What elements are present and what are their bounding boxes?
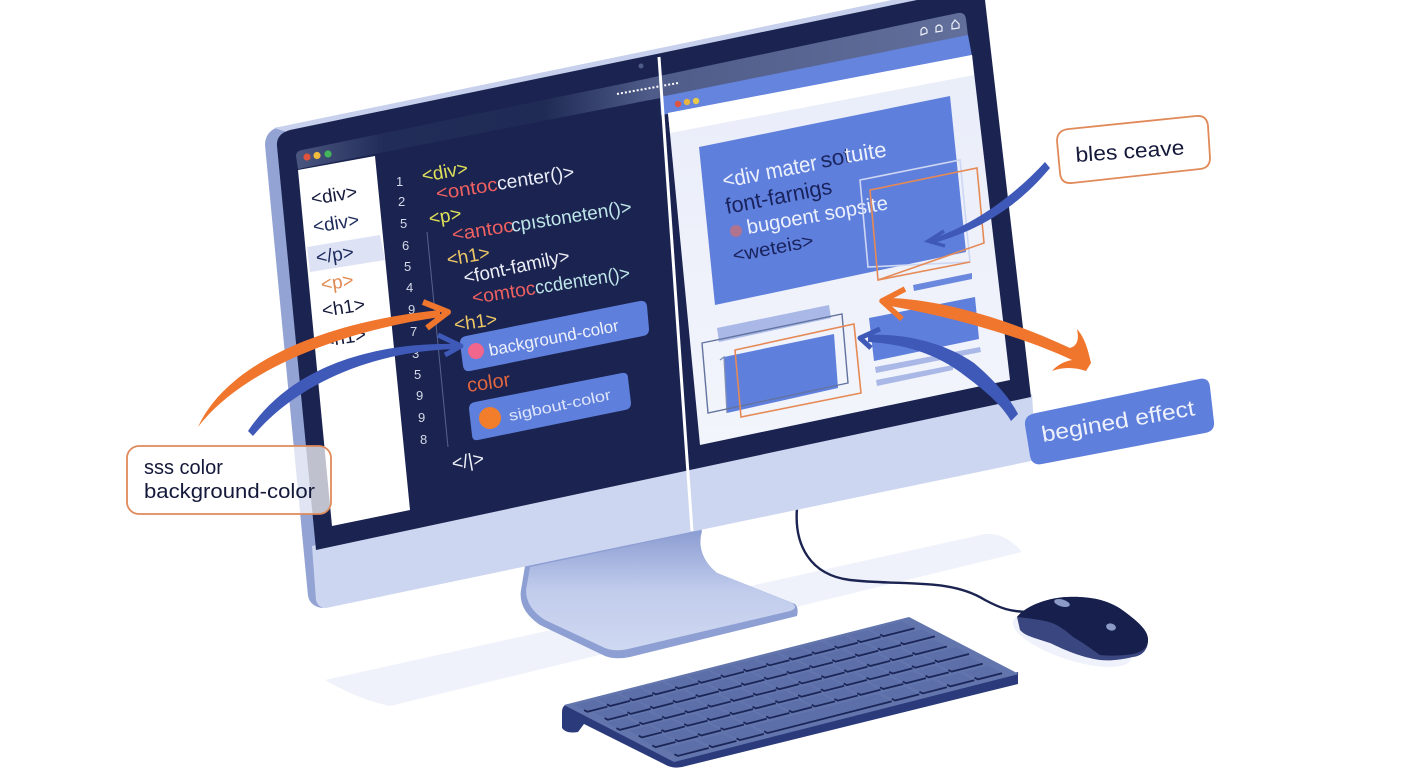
monitor left side edge (265, 127, 336, 608)
mouse top shell (1017, 597, 1148, 656)
monitor cable (797, 508, 1030, 612)
line numbers: 5 (414, 367, 421, 382)
line numbers (396, 174, 427, 447)
code lines: center()> (495, 162, 576, 195)
dotted slider line (617, 83, 678, 94)
line numbers: 9 (408, 302, 415, 317)
line numbers: 2 (398, 194, 405, 209)
code lines: <omtoc (470, 278, 537, 309)
code lines: ccdenten()> (533, 263, 632, 299)
mouse base (1017, 597, 1148, 660)
callout: begined effect (1025, 379, 1214, 464)
file tree sidebar: <h1> (321, 324, 368, 352)
keyboard front edge (562, 672, 1018, 768)
arrow: blue to preview frame (928, 162, 1050, 246)
highlight: secondary color (469, 373, 631, 440)
file tree sidebar: <p> (319, 270, 355, 296)
code lines: <font-family> (462, 246, 572, 289)
keyboard (562, 617, 1019, 768)
code lines: <antoc (450, 215, 515, 246)
editor title bar (296, 76, 660, 169)
line numbers: 5 (404, 259, 411, 274)
line numbers: 9 (418, 410, 425, 425)
callout: bles ceave: bles ceave (1075, 136, 1185, 167)
callout: css color (127, 446, 331, 514)
panel: browser preview (650, 13, 1010, 445)
file tree sidebar (298, 156, 410, 526)
hero text: <weteis> (731, 231, 815, 267)
monitor bezel (277, 0, 1031, 550)
divider line (659, 57, 692, 531)
mouse shadow (1007, 602, 1137, 678)
monitor chin (312, 394, 1036, 608)
floor shadow (325, 534, 1022, 706)
monitor stand (521, 529, 798, 658)
lower right card (869, 273, 981, 386)
code lines: <h1> (453, 309, 499, 336)
line numbers: 6 (402, 238, 409, 253)
camera dot (638, 64, 644, 68)
file tree sidebar: <h1> (320, 294, 367, 322)
highlight: secondary color: sigbout-color (507, 387, 613, 425)
line numbers: 3 (412, 346, 419, 361)
bottom key row with space bar (663, 666, 1002, 756)
code lines: </|> (450, 449, 486, 475)
line numbers: 1 (396, 174, 403, 189)
line numbers: 4 (406, 280, 413, 295)
arrow: blue to lower card (860, 329, 1018, 421)
code lines: <h1> (445, 243, 492, 271)
monitor body (265, 0, 1036, 608)
mouse (1007, 597, 1148, 678)
hero text: tuite (843, 137, 888, 168)
hero text: sot (818, 143, 852, 173)
hero text (720, 137, 890, 267)
browser top bar (650, 13, 968, 100)
mouse scroll and button details (1053, 598, 1117, 632)
window dots (303, 150, 332, 161)
arrow: orange double headed (882, 289, 1091, 371)
selection frames (860, 160, 984, 280)
file tree sidebar: <div> (309, 182, 359, 210)
code lines: <div> (420, 158, 470, 187)
hero panel (699, 96, 966, 305)
line numbers: 7 (410, 324, 417, 339)
lower left card (702, 305, 861, 417)
code lines: <p> (427, 204, 463, 230)
highlight: background-color: background-color (487, 316, 621, 360)
hero text: <div mater (720, 150, 819, 193)
toolbar icons (921, 20, 959, 35)
code lines: cpıstoneten()> (509, 197, 633, 237)
code lines: color (466, 369, 512, 397)
panel: code editor (296, 76, 660, 526)
callout: begined effect: begined effect (1040, 395, 1197, 447)
line numbers: 5 (400, 216, 407, 231)
code lines (420, 158, 633, 475)
window dots (675, 98, 699, 107)
arrow: blue to code (248, 335, 461, 436)
hero text: font-farnigs (723, 174, 834, 219)
keyboard top and keys (564, 617, 1019, 762)
code lines: <ontoc (434, 174, 499, 205)
callout: css color: sss color (144, 457, 223, 479)
file tree sidebar: <div> (311, 210, 361, 238)
callout: css color: background-color (144, 481, 315, 503)
browser blue band (660, 35, 972, 115)
highlight: background-color (460, 301, 649, 371)
browser page background (668, 55, 1010, 445)
callout: bles ceave (1057, 116, 1210, 183)
arrow: orange to code (198, 302, 448, 427)
file tree sidebar: </p> (314, 242, 355, 269)
browser white header (668, 55, 974, 133)
line numbers: 8 (420, 432, 427, 447)
line numbers: 9 (416, 388, 423, 403)
monitor top strip (274, 0, 930, 136)
hero text: bugoent sopsite (745, 192, 890, 239)
